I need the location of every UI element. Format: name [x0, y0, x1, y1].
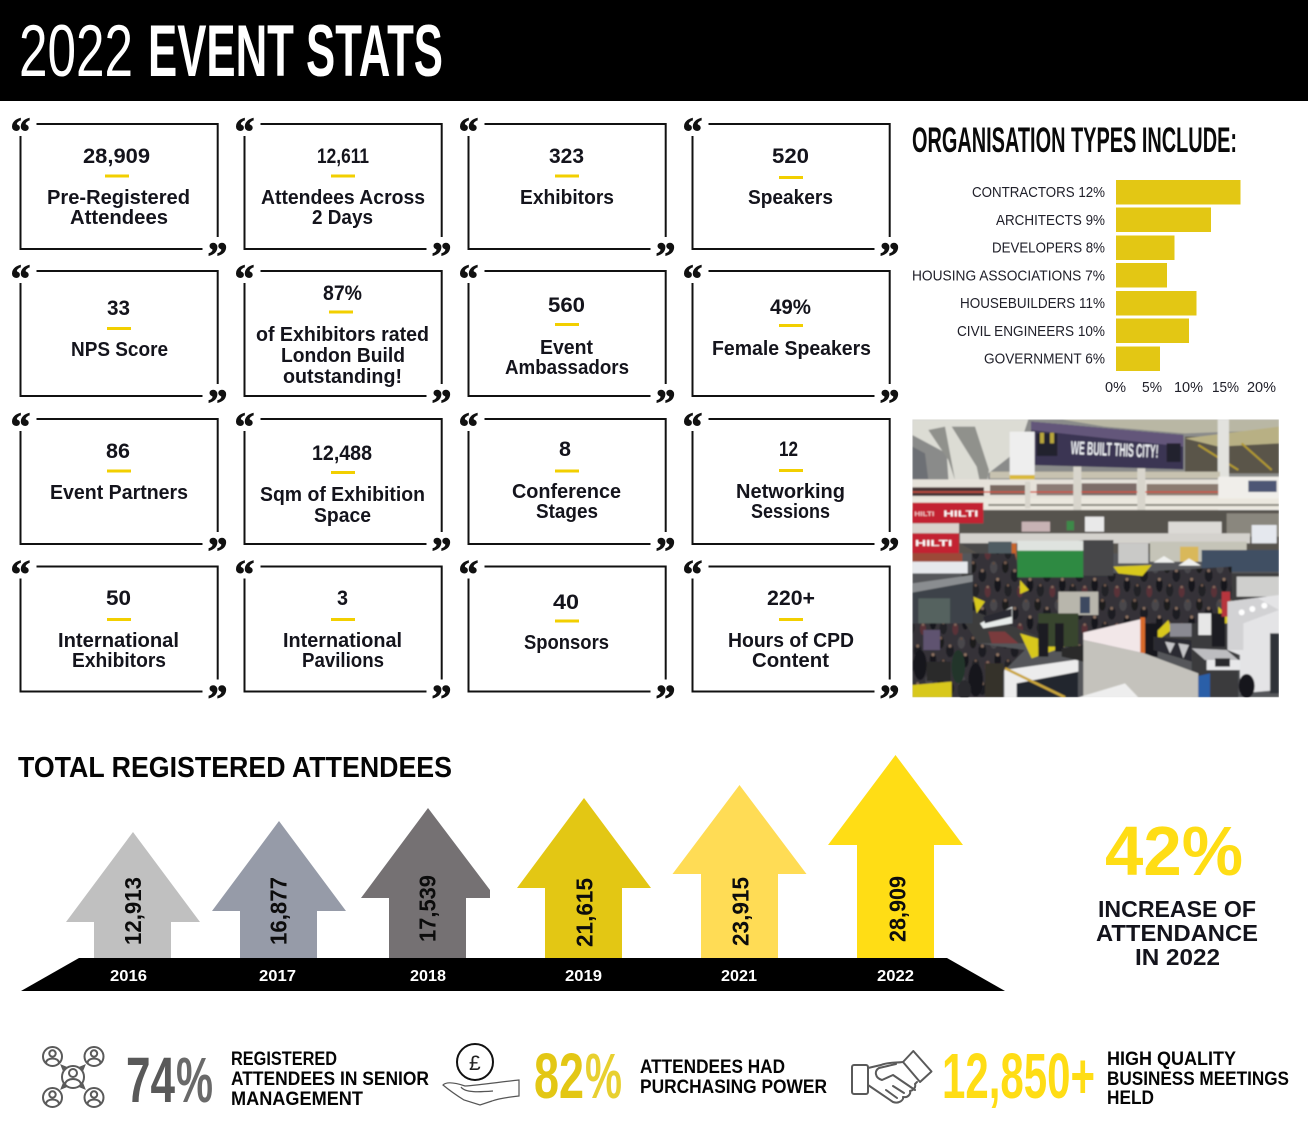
stat card: pre-registered attendees: Pre-Registered: [47, 187, 190, 209]
stat card: speakers: [682, 109, 900, 279]
stat card: speakers: “: [682, 109, 702, 154]
callout: 42% increase: [1096, 812, 1258, 970]
stat card: attendees across 2 days: “: [234, 109, 254, 154]
stat card: event ambassadors: Event: [540, 337, 593, 359]
text: business meetings: [1107, 1049, 1289, 1109]
stat card: exhibition space: Sqm of Exhibition: [260, 484, 425, 506]
title: 2022: [19, 11, 133, 92]
stat card: networking sessions: 12: [779, 438, 798, 461]
stat card: exhibitors: “: [458, 109, 478, 154]
stat card: sponsors: 40: [553, 591, 579, 614]
stat card: event partners: 86: [106, 440, 130, 463]
photo: exhibition hall: WE BUILT THIS CITY!: [1070, 437, 1159, 462]
stat card: event partners: “: [10, 404, 30, 449]
icon: people network: [43, 1047, 104, 1107]
stat: 82 percent: %: [585, 1040, 622, 1112]
stat card: international exhibitors: “: [10, 552, 30, 596]
stat card: pre-registered attendees: 28,909: [83, 145, 150, 168]
stat card: exhibition space: 12,488: [312, 442, 372, 465]
photo: exhibition hall: HILTI: [914, 511, 935, 518]
stat card: sponsors: “: [458, 552, 478, 596]
stat card: exhibitors rating: “: [234, 256, 254, 301]
icon: handshake: [852, 1051, 932, 1103]
stat card: conference stages: ”: [656, 529, 676, 574]
text: purchasing power: PURCHASING POWER: [640, 1077, 827, 1098]
stat card: conference stages: 8: [559, 438, 571, 461]
text: business meetings: HELD: [1107, 1088, 1154, 1109]
year labels: 2019: [565, 968, 602, 985]
icon: hand holding pound coin: [443, 1044, 519, 1105]
stat card: attendees across 2 days: 12,611: [317, 145, 369, 168]
arrow: 2019: 21,615: [572, 878, 598, 947]
stat card: attendees across 2 days: ”: [432, 234, 452, 279]
stat card: NPS score: “: [10, 256, 30, 301]
photo: exhibition hall: [912, 419, 1279, 700]
text: purchasing power: [640, 1057, 827, 1098]
bar: housing associations: HOUSING ASSOCIATIONS 7%: [912, 268, 1105, 284]
arrow: 2021: 23,915: [728, 877, 754, 946]
year labels: 2016: [110, 968, 147, 985]
chart axis labels: 20%: [1247, 380, 1276, 396]
stat card: event ambassadors: 560: [548, 294, 585, 317]
stat card: international exhibitors: 50: [106, 587, 131, 610]
stat card: female speakers: [682, 256, 900, 426]
stat card: CPD hours: ”: [880, 676, 900, 722]
stat: 74 percent: 74: [126, 1044, 175, 1116]
stat card: CPD hours: [682, 552, 900, 722]
bar: architects: ARCHITECTS 9%: [996, 213, 1105, 229]
bar: contractors: CONTRACTORS 12%: [972, 185, 1105, 201]
stat card: exhibitors rating: 87%: [323, 282, 362, 305]
title: EVENT STATS: [148, 11, 443, 92]
bar: civil engineers: [957, 318, 1189, 343]
stat card: exhibition space: [234, 404, 452, 574]
stat card: exhibitors: 323: [549, 145, 584, 168]
stat card: event partners: ”: [208, 529, 228, 574]
stat card: CPD hours: Hours of CPD: [728, 630, 854, 652]
bar: government: GOVERNMENT 6%: [984, 352, 1105, 368]
stat card: exhibition space: ”: [432, 529, 452, 574]
stat card: pre-registered attendees: “: [10, 109, 30, 154]
stat card: sponsors: ”: [656, 676, 676, 722]
stat card: event partners: Event Partners: [50, 482, 188, 504]
stat card: conference stages: Conference: [512, 481, 621, 503]
icon: hand holding pound coin: £: [469, 1052, 481, 1075]
stat card: speakers: ”: [880, 234, 900, 279]
sign: Hilti lower: HILTI: [915, 538, 952, 548]
stat card: NPS score: 33: [107, 297, 130, 320]
stat card: exhibitors rating: outstanding!: [283, 366, 402, 388]
bar: housebuilders: [960, 291, 1196, 316]
stat card: event ambassadors: Ambassadors: [505, 357, 629, 379]
stat card: international pavilions: 3: [337, 587, 348, 610]
stat card: NPS score: [10, 256, 228, 426]
stat card: networking sessions: ”: [880, 529, 900, 574]
stat card: networking sessions: [682, 404, 900, 574]
arrow: 2016: [66, 832, 200, 958]
stat card: pre-registered attendees: [10, 109, 228, 279]
year labels: 2018: [410, 968, 446, 985]
stat card: sponsors: [458, 552, 676, 722]
stat card: exhibitors rating: [234, 256, 452, 426]
stat card: sponsors: Sponsors: [524, 632, 609, 654]
arrow: 2021: [672, 785, 806, 958]
arrow: 2019: [517, 798, 651, 958]
stat card: CPD hours: 220+: [767, 587, 815, 610]
text: senior management: ATTENDEES IN SENIOR: [231, 1069, 429, 1090]
year labels: 2017: [259, 968, 296, 985]
stat card: speakers: Speakers: [748, 187, 833, 209]
text: business meetings: BUSINESS MEETINGS: [1107, 1069, 1289, 1090]
bar: developers: DEVELOPERS 8%: [992, 240, 1105, 256]
title: [19, 11, 443, 92]
bar: contractors: [972, 180, 1240, 204]
stat card: conference stages: [458, 404, 676, 574]
stat card: exhibitors rating: ”: [432, 381, 452, 426]
stat card: speakers: 520: [772, 145, 809, 168]
stat card: networking sessions: Sessions: [751, 501, 830, 523]
sign: Hilti: HILTI: [943, 510, 978, 519]
stat card: international pavilions: [234, 552, 452, 722]
arrow: 2017: 16,877: [266, 877, 292, 945]
arrow: 2022: 28,909: [884, 876, 910, 942]
stat card: conference stages: Stages: [536, 501, 598, 523]
text: business meetings: HIGH QUALITY: [1107, 1049, 1236, 1070]
stat card: female speakers: Female Speakers: [712, 338, 871, 360]
text: senior management: [231, 1049, 429, 1110]
stat card: attendees across 2 days: Attendees Across: [261, 187, 425, 209]
chart axis labels: [1105, 380, 1276, 396]
heading: total registered attendees: TOTAL REGISTERED ATTENDEES: [18, 752, 452, 784]
arrow: 2022: [828, 755, 963, 958]
stat card: CPD hours: Content: [752, 650, 829, 672]
stat card: international exhibitors: Exhibitors: [72, 650, 166, 672]
stat card: conference stages: “: [458, 404, 478, 449]
chart axis labels: 15%: [1212, 380, 1239, 396]
bar: developers: [992, 236, 1174, 260]
stat card: exhibitors: Exhibitors: [520, 187, 614, 209]
stat card: event ambassadors: “: [458, 256, 478, 301]
text: senior management: REGISTERED: [231, 1049, 337, 1070]
bar chart: organisation types: [912, 180, 1276, 396]
stat card: NPS score: NPS Score: [71, 339, 168, 361]
stat card: international pavilions: International: [283, 630, 402, 652]
stat card: international exhibitors: [10, 552, 228, 722]
stat card: international exhibitors: ”: [208, 676, 228, 722]
text: purchasing power: ATTENDEES HAD: [640, 1057, 785, 1078]
callout: 42% increase: IN 2022: [1135, 944, 1220, 970]
stat card: NPS score: ”: [208, 381, 228, 426]
header band: [0, 0, 1308, 101]
stat card: event ambassadors: [458, 256, 676, 426]
stat: 74 percent: %: [176, 1044, 213, 1116]
year labels: [110, 968, 914, 985]
stat: 12,850+: 12,850+: [942, 1040, 1095, 1112]
bar: government: [984, 346, 1160, 371]
stat card: exhibitors rating: London Build: [281, 345, 405, 367]
arrow: 2017: [212, 821, 346, 958]
stat card: attendees across 2 days: [234, 109, 452, 279]
callout: 42% increase: 42%: [1105, 812, 1243, 890]
stat: 82 percent: 82: [534, 1040, 584, 1112]
bar: housebuilders: HOUSEBUILDERS 11%: [960, 296, 1105, 312]
stat card: female speakers: ”: [880, 381, 900, 426]
stat card: exhibition space: “: [234, 404, 254, 449]
stat card: event partners: [10, 404, 228, 574]
chart axis labels: 0%: [1105, 380, 1126, 396]
stat card: pre-registered attendees: ”: [208, 234, 228, 279]
stat card: female speakers: “: [682, 256, 702, 301]
stat card: pre-registered attendees: Attendees: [70, 207, 168, 229]
year labels: 2021: [721, 968, 757, 985]
callout: 42% increase: ATTENDANCE: [1096, 920, 1258, 946]
stat card: international exhibitors: International: [58, 630, 179, 652]
stat card: exhibitors rating: of Exhibitors rated: [256, 324, 429, 346]
chart axis labels: 10%: [1174, 380, 1203, 396]
stat card: networking sessions: Networking: [736, 481, 845, 503]
callout: 42% increase: INCREASE OF: [1098, 896, 1256, 922]
stat card: exhibitors: ”: [656, 234, 676, 279]
bar: housing associations: [912, 263, 1167, 288]
bar: architects: [996, 208, 1211, 232]
stat card: international pavilions: “: [234, 552, 254, 596]
arrow: 2018: [361, 808, 490, 958]
stat card: exhibitors: [458, 109, 676, 279]
stat card: attendees across 2 days: 2 Days: [312, 207, 373, 229]
stat card: CPD hours: “: [682, 552, 702, 596]
stat card: international pavilions: Pavilions: [302, 650, 384, 672]
arrow: 2018: 17,539: [414, 875, 440, 942]
stat card: international pavilions: ”: [432, 676, 452, 722]
chart axis labels: 5%: [1142, 380, 1162, 396]
timeline base: [21, 958, 1005, 991]
stat card: female speakers: 49%: [770, 296, 811, 319]
text: senior management: MANAGEMENT: [231, 1089, 363, 1110]
stat card: exhibition space: Space: [314, 505, 371, 527]
arrow: 2016: 12,913: [120, 877, 146, 945]
stat card: event ambassadors: ”: [656, 381, 676, 426]
year labels: 2022: [877, 968, 914, 985]
bar: civil engineers: CIVIL ENGINEERS 10%: [957, 324, 1105, 340]
stat card: networking sessions: “: [682, 404, 702, 449]
